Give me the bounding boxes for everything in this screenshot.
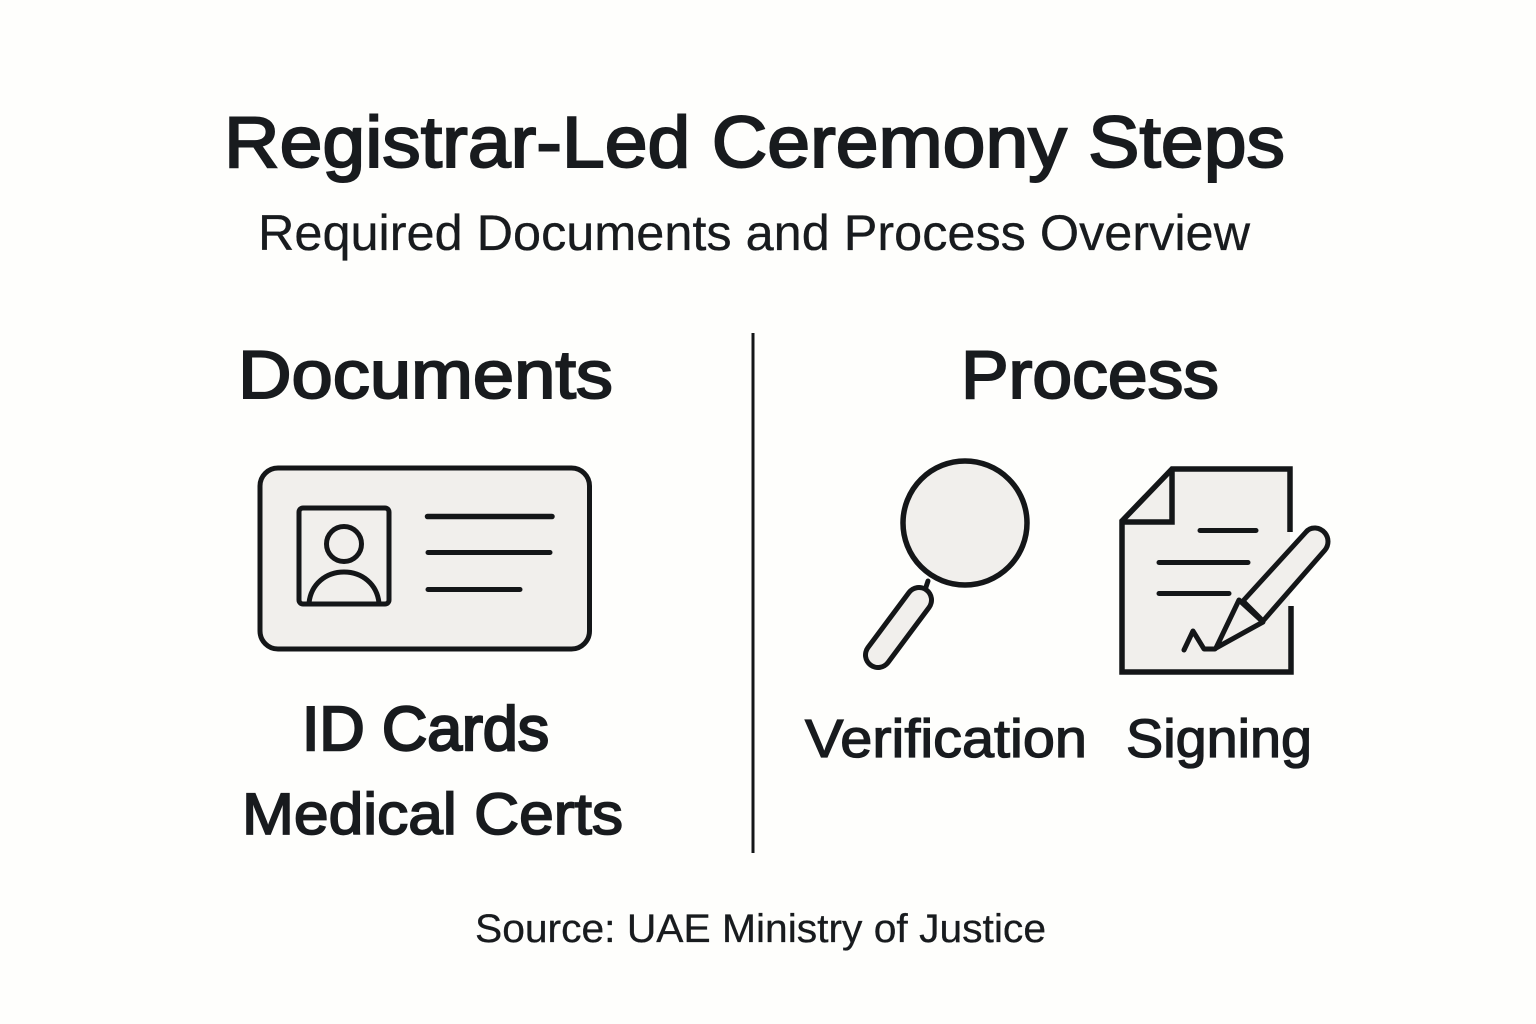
label: Medical Certs: Medical Certs — [242, 782, 623, 847]
heading: documents: Documents — [238, 337, 613, 413]
icon: magnifying glass — [878, 461, 1027, 655]
label: Verification: Verification — [805, 709, 1087, 769]
heading: process: Process — [961, 337, 1219, 413]
title: Registrar-Led Ceremony Steps — [224, 103, 1285, 183]
source note: Source: UAE Ministry of Justice — [475, 907, 1046, 951]
label: Signing: Signing — [1126, 709, 1312, 769]
icon: signed document — [1122, 469, 1328, 672]
label: ID Cards: ID Cards — [302, 695, 549, 764]
subtitle: Required Documents and Process Overview — [258, 205, 1251, 261]
panel: documents — [238, 337, 623, 847]
panel: process — [805, 337, 1328, 769]
icon: ID card — [260, 468, 590, 649]
divider between panels — [752, 333, 754, 853]
